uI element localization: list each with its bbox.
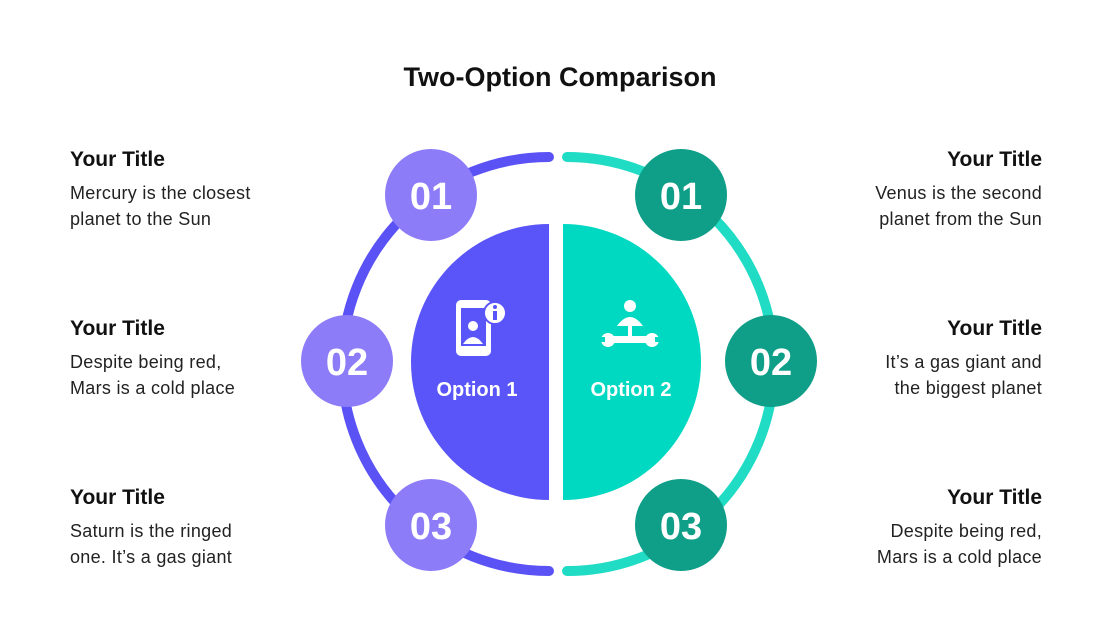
text: left 1 xyxy=(70,148,251,229)
badge: left 01 xyxy=(385,149,477,241)
text: right 2 xyxy=(885,317,1042,398)
badge: left 03: 03 xyxy=(410,506,452,548)
title: Two-Option Comparison xyxy=(404,62,716,92)
badge: right 01 xyxy=(635,149,727,241)
badge: right 02: 02 xyxy=(750,342,792,384)
badge: right 03 xyxy=(635,479,727,571)
text: left 3: one. It’s a gas giant xyxy=(70,547,232,567)
half disc: option 2 xyxy=(563,224,701,500)
text: right 2: Your Title xyxy=(947,317,1042,340)
text: left 2: Your Title xyxy=(70,317,165,340)
text: right 3 xyxy=(877,486,1042,567)
icon: phone info xyxy=(456,300,506,356)
badge: right 02 xyxy=(725,315,817,407)
text: left 2: Mars is a cold place xyxy=(70,378,235,398)
arc: right xyxy=(567,157,774,571)
badge: left 02 xyxy=(301,315,393,407)
text: right 3: Mars is a cold place xyxy=(877,547,1042,567)
text: right 1: Venus is the second xyxy=(875,183,1042,203)
text: left 1: planet to the Sun xyxy=(70,209,211,229)
text: left 1: Your Title xyxy=(70,148,165,171)
text: right 2: the biggest planet xyxy=(894,378,1042,398)
badge: right 01: 01 xyxy=(660,176,702,218)
label: option 1: Option 1 xyxy=(436,379,518,401)
badges xyxy=(301,149,817,571)
arc: left xyxy=(342,157,549,571)
text: left 3: Saturn is the ringed xyxy=(70,521,232,541)
text: right 3: Despite being red, xyxy=(890,521,1042,541)
text: left 1: Mercury is the closest xyxy=(70,183,251,203)
label: option 2: Option 2 xyxy=(590,379,672,401)
text: right 1 xyxy=(875,148,1042,229)
text: right 3: Your Title xyxy=(947,486,1042,509)
text: left 3: Your Title xyxy=(70,486,165,509)
half disc: option 1 xyxy=(411,224,549,500)
text: right 1: Your Title xyxy=(947,148,1042,171)
badge: right 03: 03 xyxy=(660,506,702,548)
badge: left 03 xyxy=(385,479,477,571)
text: right 2: It’s a gas giant and xyxy=(885,352,1042,372)
icon: person wrench xyxy=(597,300,663,347)
badge: left 02: 02 xyxy=(326,342,368,384)
text: left 3 xyxy=(70,486,232,567)
text: left 2: Despite being red, xyxy=(70,352,222,372)
text: right 1: planet from the Sun xyxy=(879,209,1042,229)
badge: left 01: 01 xyxy=(410,176,452,218)
text: left 2 xyxy=(70,317,235,398)
